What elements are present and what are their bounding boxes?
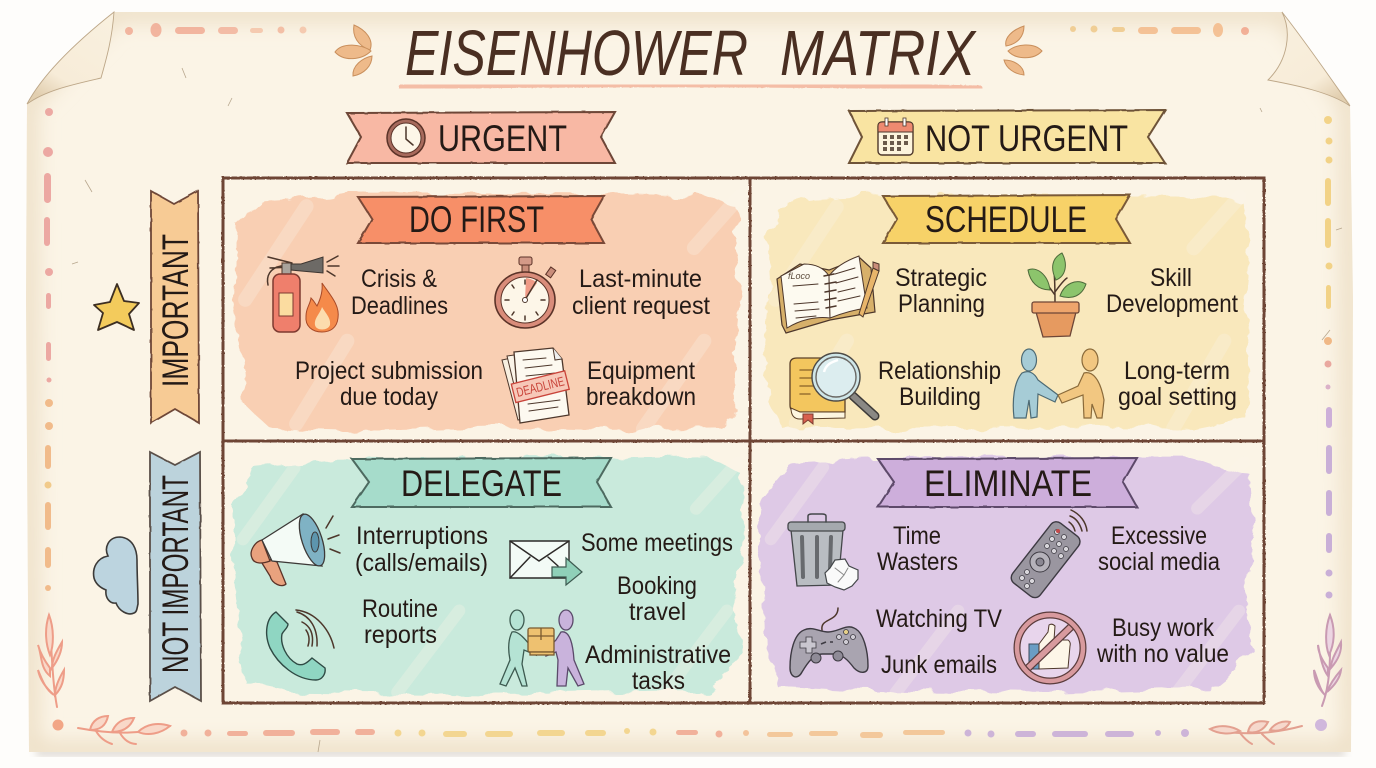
text: crisis and deadlines: Crisis & [361,265,437,293]
icon: calendar [878,118,913,155]
text: routine reports [362,595,438,649]
icon: tv remote [1008,510,1087,600]
text: project submission due today: due today [340,383,438,411]
border dots: left edge [43,108,53,591]
text: administrative tasks: tasks [632,667,685,695]
icon: book and magnifying glass [790,353,875,424]
side banner: important [151,191,199,423]
banner: eliminate: ELIMINATE [924,463,1092,504]
icon: important star [94,284,139,330]
banner: schedule: SCHEDULE [925,199,1087,240]
sprig: left edge [38,615,64,707]
text: some meetings: Some meetings [581,529,733,557]
header banner: urgent [347,112,615,163]
side banner: not important: NOT IMPORTANT [155,475,196,673]
icon: left title leaves [335,25,372,76]
paint wash: delegate [233,456,743,694]
icon: phone with signal [267,610,334,680]
icon: clock [387,119,425,157]
border dots: right edge [1324,116,1332,598]
banner: delegate [352,458,611,507]
text: booking travel [617,572,697,626]
icon: right title leaves [1004,26,1042,75]
sprig: bottom left corner [52,716,170,744]
text: last-minute client request: Last-minute [579,265,702,293]
icon: potted plant [1028,253,1086,337]
text: excessive social media: social media [1098,548,1220,576]
icon: not important cloud [94,537,138,614]
paint wash: eliminate [756,457,1253,693]
header banner: not urgent [849,110,1165,163]
icon: open planner with pencil [777,256,879,333]
title: EISENHOWER [405,17,748,89]
text: last-minute client request [572,265,710,320]
title: MATRIX [780,17,977,89]
text: routine reports: reports [364,621,437,649]
text: relationship building: Relationship [878,357,1001,385]
text: strategic planning: Strategic [895,264,987,292]
header banner: not urgent: NOT URGENT [925,118,1128,159]
icon: fire extinguisher [268,256,339,332]
text: crisis and deadlines [351,265,448,320]
text: administrative tasks: Administrative [585,641,731,669]
text: crisis and deadlines: Deadlines [351,292,448,320]
icon: megaphone [251,511,340,586]
side banner: important: IMPORTANT [155,234,196,387]
quadrant: eliminate [756,457,1253,693]
sprig: right edge [1314,615,1341,731]
text: project submission due today: Project submission [295,357,483,385]
text: interruptions calls emails: Interruptions [356,522,488,550]
paint wash: do first [235,192,741,431]
text: strategic planning [895,264,987,318]
text: booking travel: travel [629,598,686,626]
text: excessive social media [1098,522,1220,576]
text: interruptions calls emails [355,522,488,577]
icon: deadline documents [502,348,569,423]
text: last-minute client request: client request [572,292,710,320]
border dots: top right [1070,23,1249,37]
icon: open planner with pencil: fLoco [788,271,810,281]
paint wash: schedule [763,195,1251,429]
text: skill development: Skill [1150,264,1192,292]
text: equipment breakdown: breakdown [586,383,696,411]
text: relationship building [878,357,1001,411]
text: excessive social media: Excessive [1111,522,1207,550]
quadrant: do first [235,192,741,431]
text: administrative tasks [585,641,731,695]
text: watching tv: Watching TV [876,605,1002,633]
banner: do first: DO FIRST [409,199,544,240]
text: time wasters [877,522,958,576]
banner: schedule [883,195,1130,243]
banner: do first [358,196,604,243]
icon: trash can and crumpled paper [788,514,858,590]
text: relationship building: Building [899,383,981,411]
text: busy work with no value: with no value [1096,640,1229,668]
text: junk emails: Junk emails [881,651,997,679]
text: long-term goal setting: Long-term [1124,357,1230,385]
text: long-term goal setting [1118,357,1237,411]
icon: stopwatch [495,257,556,328]
border dots: top left [125,23,306,37]
icon: envelope with arrow [510,541,582,585]
header banner: urgent: URGENT [438,118,567,159]
quadrant: delegate [233,456,743,695]
text: routine reports: Routine [362,595,438,623]
icon: thumbs up prohibited [1017,615,1083,681]
text: time wasters: Wasters [877,548,958,576]
icon: two people passing a box [500,610,584,686]
text: equipment breakdown [586,357,696,411]
sprig: bottom right corner [1210,721,1302,744]
text: skill development: Development [1106,290,1238,318]
text: long-term goal setting: goal setting [1118,383,1237,411]
border dots: bottom edge [180,728,1189,738]
text: busy work with no value: Busy work [1112,614,1214,642]
icon: deadline documents: DEADLINE [515,373,566,400]
matrix grid [223,178,1264,703]
side banner: not important [150,452,201,701]
icon: game controller [790,608,868,677]
banner: eliminate [878,458,1137,507]
text: strategic planning: Planning [898,290,985,318]
banner: delegate: DELEGATE [401,463,562,504]
text: interruptions calls emails: (calls/emails) [355,549,488,577]
text: busy work with no value [1096,614,1229,668]
quadrant: schedule [763,195,1251,429]
text: time wasters: Time [893,522,941,550]
text: skill development [1106,264,1238,318]
icon: handshake people [1013,349,1104,418]
text: equipment breakdown: Equipment [587,357,695,385]
text: booking travel: Booking [617,572,697,600]
text: project submission due today [295,357,483,411]
